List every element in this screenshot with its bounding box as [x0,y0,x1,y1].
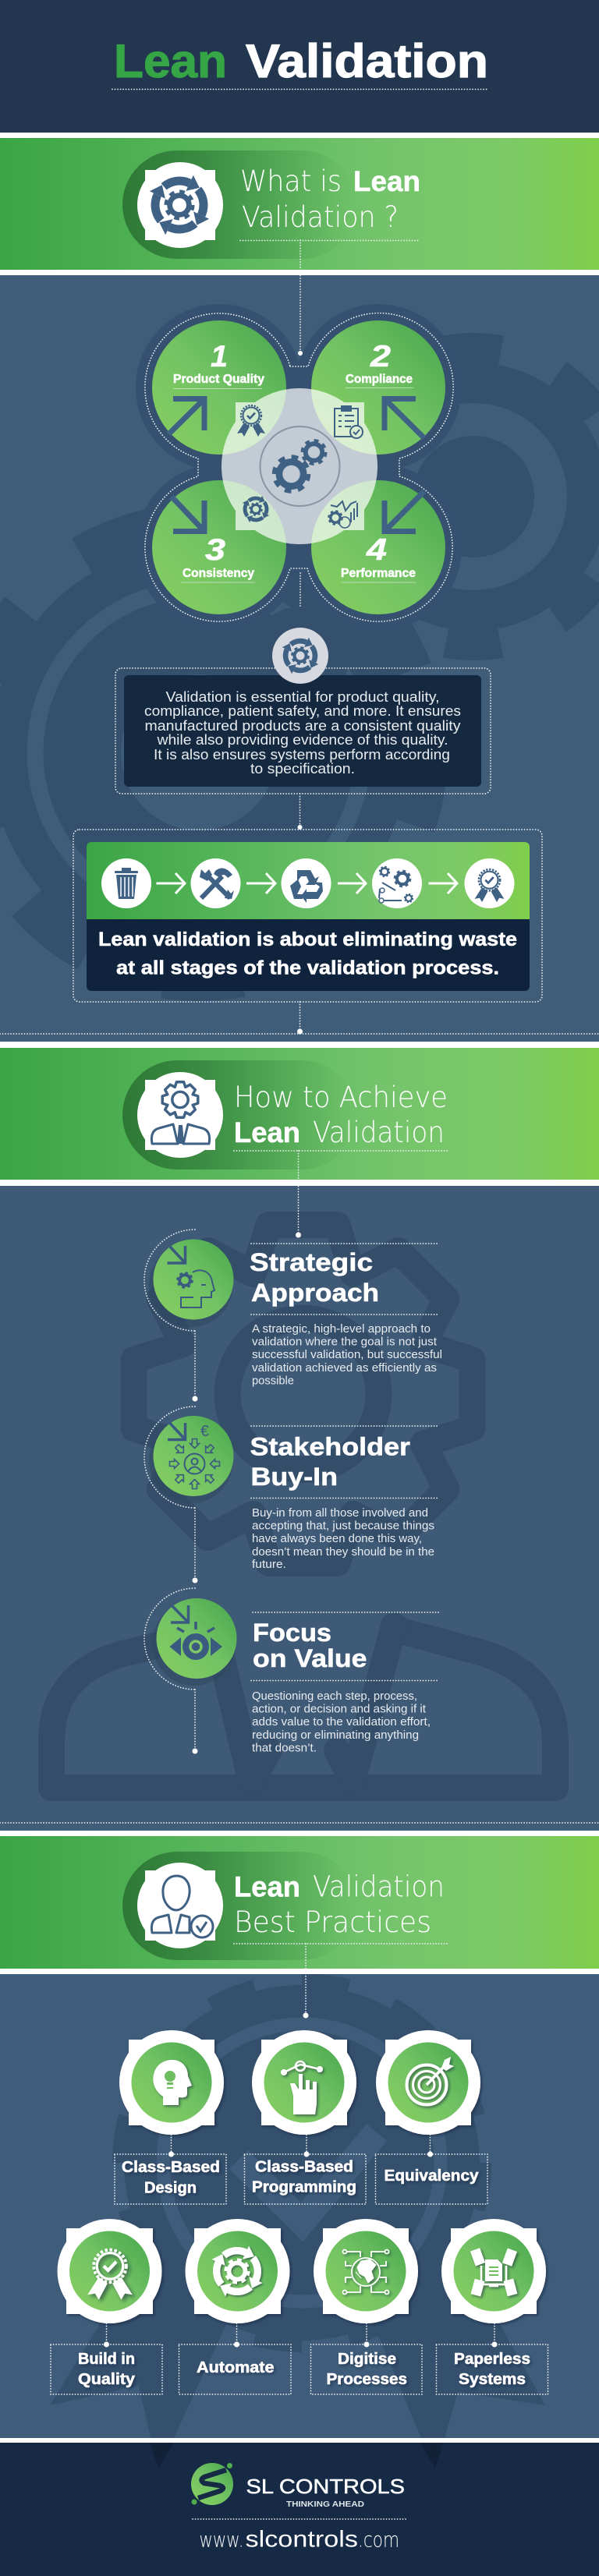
heading: what is lean validation: What is [240,165,342,198]
text: strategic description: possible [252,1374,294,1388]
pillar 4: performance: 4 [366,533,387,567]
text: focus description: action, or decision and asking if it [252,1703,427,1715]
text: strategic description: successful validation, but successful [252,1348,442,1361]
icon: clipboard [335,406,363,438]
label [245,2152,366,2204]
label: Paperless [454,2351,530,2368]
practice: automate [179,2219,291,2394]
text: focus description: adds value to the validation effort, [252,1715,431,1729]
heading: stakeholder buy-in: Buy-In [251,1463,338,1491]
text: stakeholder description: have always been done this way, [252,1532,422,1545]
pillar 3: consistency [152,480,286,614]
label [179,2342,291,2394]
icon: eye [144,1588,237,1690]
icon: cycle gear badge [186,2219,290,2323]
icon: person with gear badge [137,1072,223,1158]
icon: medal [237,405,265,437]
pillar 1: product quality: Product Quality [173,373,264,386]
dot [303,2013,309,2018]
text: stakeholder description: future. [252,1558,286,1571]
text: focus description [252,1690,431,1754]
pillar 3: consistency: 3 [205,533,225,567]
icon: consistency cycle gear [243,496,269,522]
dot [298,619,303,624]
heading: how to achieve lean validation: How to Achieve [234,1081,448,1114]
dot [192,1578,198,1583]
arrow [246,873,275,893]
text block: explanation [144,689,461,777]
icon: head with bulb badge [119,2030,224,2135]
watermark: award seal [50,1980,545,2472]
icon: small cycle badge [272,628,328,684]
label: Build in [78,2351,135,2368]
text: strategic description [252,1322,442,1388]
heading: how to achieve lean validation: Lean [234,1116,300,1148]
logo: SL Controls [191,2463,405,2509]
icon: globe circuit badge [314,2219,418,2323]
dot [297,1029,303,1034]
practice: equivalency [376,2030,487,2204]
dot [192,1748,198,1754]
text: strategic description: validation achieved as efficiently as [252,1361,437,1375]
pillar 1: product quality: 1 [211,340,228,373]
green band: best practices [0,1831,599,1974]
header band [0,0,599,133]
pillar 4: performance: Performance [341,567,416,580]
website url [200,2526,399,2553]
halo: small badge [251,607,349,705]
title: Lean Validation [112,35,488,89]
text: waste statement: at all stages of the validation process. [116,957,499,979]
pillar 4: performance [311,480,445,614]
heading: how to achieve lean validation [234,1081,448,1151]
text block: explanation: to specification. [250,761,355,777]
pillar 2: compliance: 2 [370,340,391,373]
text block: explanation: It is also ensures systems perform according [154,747,450,763]
practice: class-based design [115,2030,226,2204]
practice: build in quality [51,2219,162,2394]
footer [0,2438,599,2576]
label: Quality [78,2371,136,2388]
dot [192,1396,198,1402]
icon: cycle gear badge [137,162,223,248]
green band: how to achieve [0,1042,599,1186]
heading: lean validation best practices [234,1870,448,1944]
pillar 1: product quality [152,320,286,455]
dot [298,825,303,830]
label [376,2152,487,2204]
dot [298,351,303,356]
heading: what is lean validation: Lean [353,165,420,197]
label: Systems [459,2371,526,2388]
text: stakeholder description: Buy-in from all those involved and [252,1506,428,1520]
watermark: right gear [417,333,599,660]
text: stakeholder description: accepting that, just because things [252,1519,434,1533]
label: Automate [197,2359,275,2376]
icon: trash [101,858,151,908]
centre gears icon [261,426,340,506]
practice: paperless systems [437,2219,548,2394]
heading: focus on value [253,1619,367,1672]
text block: explanation: while also providing evidence of this quality. [156,732,448,748]
icon: recycle [281,858,331,908]
practice: digitise processes [310,2219,422,2394]
text: stakeholder description: doesn’t mean they should be in the [252,1545,434,1559]
watermark: person with gear [51,1225,555,1788]
label: Design [144,2180,197,2197]
dot [296,1232,301,1238]
arrow [338,873,366,893]
icon: stakeholder: € [200,1423,209,1440]
label [51,2342,162,2394]
heading: stakeholder buy-in: Stakeholder [250,1433,410,1461]
icon: tools [190,858,240,908]
icon: target badge [376,2030,480,2135]
title: Lean Validation: Lean [114,35,227,87]
website url: slcontrols [245,2526,358,2553]
label [310,2342,422,2394]
text: stakeholder description [252,1506,434,1571]
centre pale badge [222,388,377,544]
arrow [156,873,185,893]
heading: stakeholder buy-in [250,1433,410,1491]
diagram: four pillars [136,304,462,631]
heading: strategic approach: Strategic [250,1248,373,1276]
panel: validation explanation [115,668,491,794]
heading: lean validation best practices: Lean [234,1871,300,1902]
text: strategic description: validation where the goal is not just [252,1335,438,1349]
dotted outline [145,313,453,621]
icon: medal badge [58,2219,162,2323]
pillar 2: compliance: Compliance [346,373,413,386]
heading: what is lean validation [240,165,420,240]
heading: how to achieve lean validation: Validation [313,1116,445,1149]
text: waste statement: Lean validation is about eliminating waste [98,929,517,950]
green band: what is lean validation [0,133,599,275]
label: Class-Based [122,2159,220,2176]
icon: medal in circle [465,858,515,908]
step: strategic approach [144,1230,442,1388]
section background: how to achieve [0,1186,599,1823]
label: Equivalency [384,2167,479,2185]
halo behind circles [136,304,462,631]
logo: SL Controls: THINKING AHEAD [286,2500,364,2509]
label [115,2152,226,2204]
step: stakeholder buy-in [144,1407,438,1571]
text: focus description: that doesn’t. [252,1742,317,1754]
text: waste statement [98,929,517,979]
heading: lean validation best practices: Best Practices [234,1905,431,1939]
icon: hand touch badge [252,2030,356,2135]
heading: lean validation best practices: Validation [313,1870,445,1904]
arrow [429,873,457,893]
text: focus description: Questioning each step, process, [252,1690,417,1703]
website url: .com [358,2528,399,2553]
text block: explanation: manufactured products are a consistent quality [145,718,460,734]
text block: explanation: compliance, patient safety, and more. It ensures [144,703,461,719]
label: Class-Based [255,2158,353,2175]
icon: stakeholder [144,1407,234,1508]
label: Digitise [338,2351,396,2368]
heading: strategic approach: Approach [251,1279,379,1307]
pillar 2: compliance [311,320,445,455]
icon: person with check badge [137,1863,223,1948]
icon: machinery [372,858,422,908]
label [437,2342,548,2394]
panel: lean validation waste [73,830,542,1002]
icon: documents badge [441,2219,546,2323]
label: Programming [252,2178,356,2196]
label: Processes [326,2371,407,2388]
logo: SL Controls: SL CONTROLS [246,2475,405,2498]
heading: strategic approach [250,1248,379,1307]
step: focus on value [144,1588,439,1754]
section background: best practices [50,1974,545,2438]
text: strategic description: A strategic, high-level approach to [252,1322,431,1336]
heading: focus on value: on Value [253,1644,367,1672]
icon: performance chart [328,501,357,528]
pillar 3: consistency: Consistency [183,567,254,580]
heading: focus on value: Focus [253,1619,331,1647]
heading: what is lean validation: Validation ? [242,200,399,234]
text block: explanation: Validation is essential for product quality, [165,689,440,705]
text: focus description: reducing or eliminating anything [252,1729,419,1742]
watermark: left gear [0,521,431,984]
section background: what is lean validation [0,333,599,1001]
website url: www. [200,2528,243,2553]
practice: class-based programming [245,2030,366,2204]
title: Lean Validation: Validation [246,35,488,87]
icon: strategic head [144,1230,234,1331]
